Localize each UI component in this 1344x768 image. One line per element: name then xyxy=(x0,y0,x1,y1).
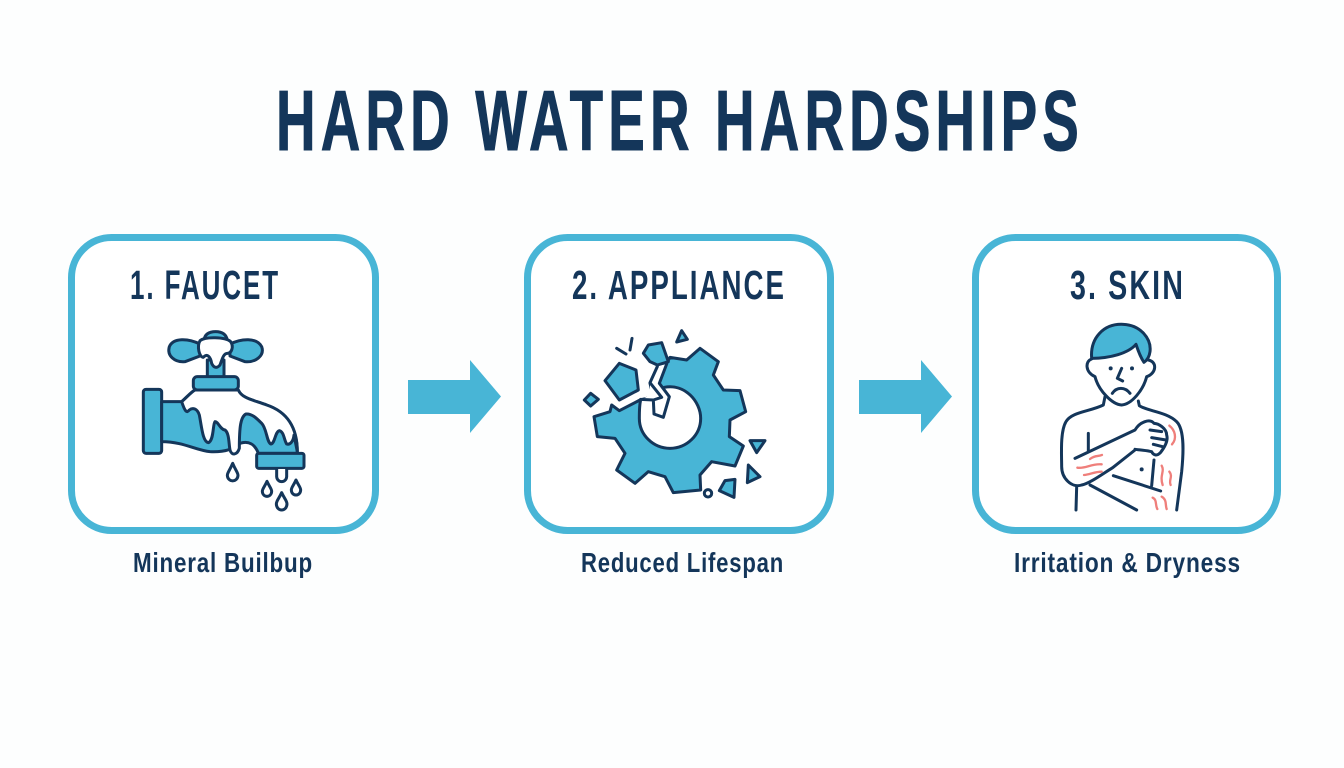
icon: person with irritated skin xyxy=(1061,324,1183,510)
panel: faucet xyxy=(72,238,376,578)
icon: broken gear xyxy=(584,331,765,497)
heading: appliance: 2. APPLIANCE xyxy=(572,262,786,308)
panel frame: skin xyxy=(976,238,1278,530)
caption: skin: Irritation & Dryness xyxy=(1014,547,1241,578)
arrow: appliance to skin xyxy=(859,360,952,433)
panel frame: faucet xyxy=(72,238,376,530)
panel: appliance xyxy=(528,238,830,578)
heading: skin: 3. SKIN xyxy=(1070,262,1185,308)
caption: faucet: Mineral Builbup xyxy=(133,547,313,578)
caption: appliance: Reduced Lifespan xyxy=(581,547,784,578)
panel: skin xyxy=(976,238,1278,578)
heading: faucet: 1. FAUCET xyxy=(130,262,280,308)
panel frame: appliance xyxy=(528,238,830,530)
icon: faucet with mineral buildup xyxy=(143,332,304,510)
arrow: faucet to appliance xyxy=(408,360,501,433)
